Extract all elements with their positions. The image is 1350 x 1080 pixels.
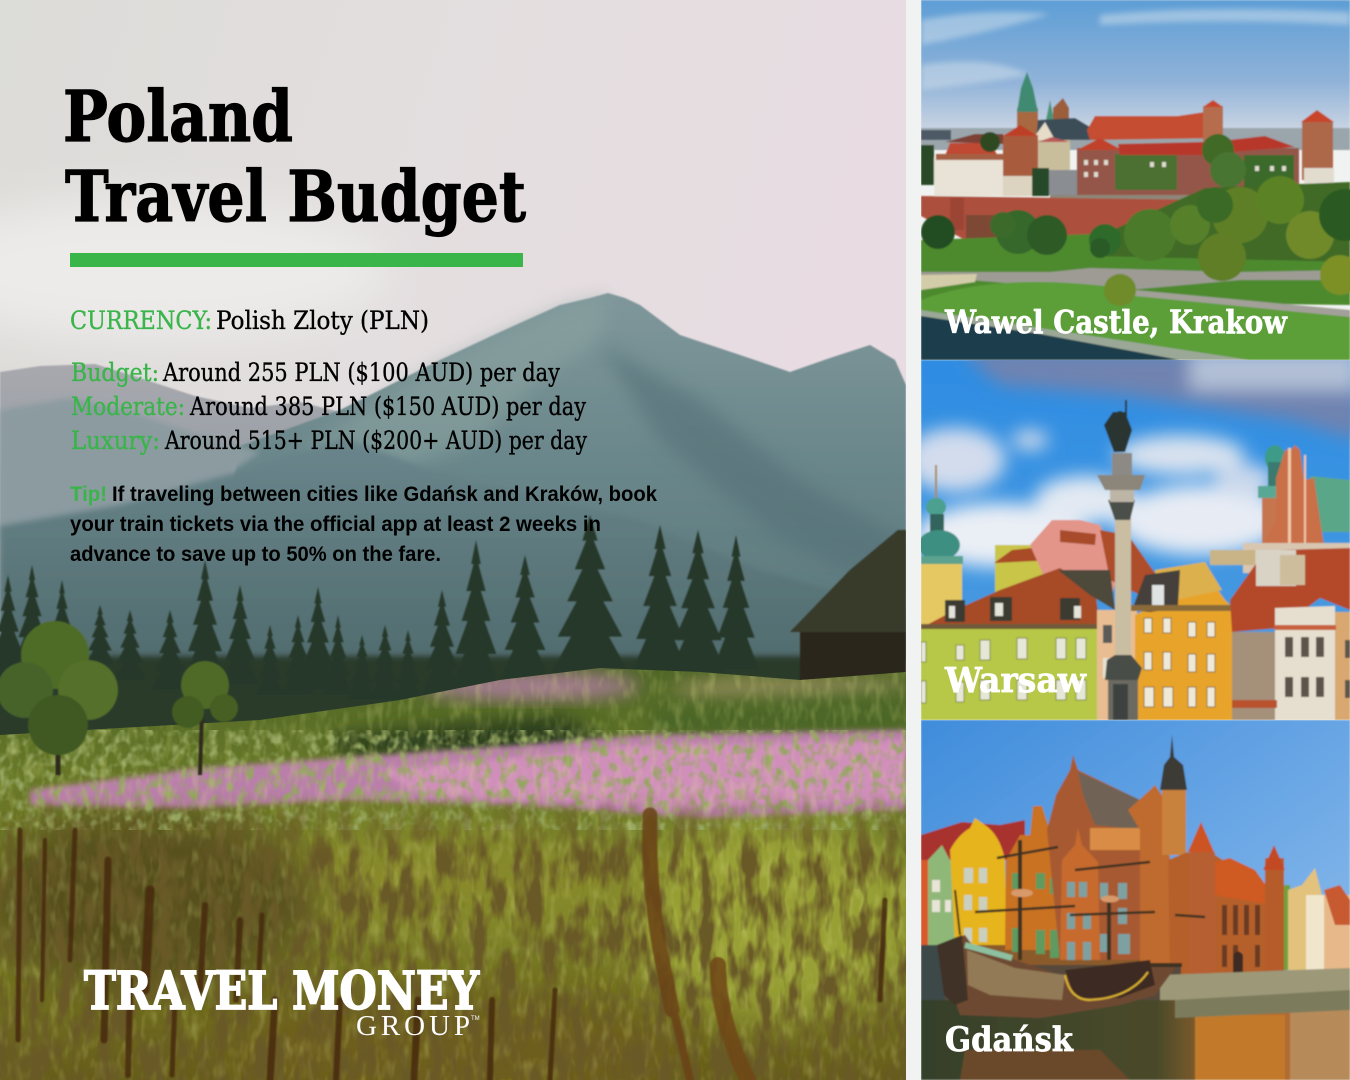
lawns: [921, 225, 1350, 305]
small gabled front: [1060, 828, 1100, 960]
long palace building: [1077, 148, 1299, 196]
green building roof: [928, 568, 1099, 626]
deciduous trees: [0, 621, 238, 775]
water: [921, 1000, 1350, 1080]
photo caption: Wawel Castle: Wawel Castle, Krakow: [944, 303, 1288, 341]
meadow: [0, 660, 920, 1080]
budget levels: Around 385 PLN ($150 AUD) per day: [189, 392, 587, 421]
fortress wall: [921, 194, 1180, 240]
sky: [921, 0, 1350, 135]
budget levels: Budget:: [71, 358, 159, 387]
title: Travel Budget: [65, 155, 526, 238]
brick tower: [1002, 134, 1039, 177]
ornate gable and tower: [1128, 785, 1170, 970]
photo caption: Gdansk: Gdańsk: [945, 1020, 1074, 1060]
brick merchant house: [1047, 755, 1147, 960]
peach building: [1097, 610, 1137, 720]
distant mountains: [0, 293, 906, 680]
orange gabled house: [1005, 806, 1065, 950]
budget levels: Moderate:: [71, 392, 185, 421]
sky: [921, 720, 1350, 971]
yellow-green house: [995, 545, 1050, 595]
tip text: If traveling between cities like Gdańsk and Kraków, book: [112, 483, 657, 506]
left turret: [921, 560, 962, 625]
title underline bar: [70, 253, 523, 267]
sky and clouds: [921, 360, 1350, 660]
budget levels: Around 515+ PLN ($200+ AUD) per day: [164, 426, 588, 455]
tip text: [70, 483, 657, 566]
budget levels: Luxury:: [71, 426, 160, 455]
right red roofs: [1230, 548, 1350, 632]
icon: wooden hut: [790, 530, 906, 682]
currency line: [70, 306, 429, 335]
left houses: [921, 860, 928, 950]
tan and white buildings: [1232, 632, 1277, 720]
treeline: [0, 515, 801, 735]
lime green building: [921, 628, 1097, 720]
orange-yellow buildings: [1134, 590, 1235, 720]
river: [921, 314, 1180, 360]
right colored houses: [1284, 885, 1290, 970]
tip text: advance to save up to 50% on the fare.: [70, 543, 441, 566]
roofs behind: [921, 820, 1025, 860]
back red roofs: [1087, 112, 1223, 140]
green spire tower: [1017, 108, 1038, 140]
panel: Gdansk photo: [921, 720, 1350, 1080]
church and green roof: [1310, 476, 1350, 532]
trees: [921, 176, 1350, 306]
logo: Travel Money Group: TRAVEL MONEY: [84, 961, 480, 1022]
panel: Wawel Castle photo: [921, 0, 1350, 360]
panel: mountain meadow photo: [0, 0, 920, 1080]
tip text: your train tickets via the official app at least 2 weeks in: [70, 513, 601, 536]
title: Poland: [63, 75, 293, 158]
budget levels: [71, 358, 588, 455]
sky: [0, 0, 906, 529]
flower stalks: [18, 815, 885, 1080]
white wall and red roof: [934, 158, 1004, 196]
galleon hull: [937, 935, 1175, 1018]
ship masts and rigging: [955, 840, 1205, 960]
logo: Travel Money Group: GROUP: [356, 1010, 470, 1042]
granary: [1168, 852, 1285, 975]
yellow house: [950, 818, 1007, 945]
tip text: Tip!: [70, 483, 107, 506]
tree beside palace: [1202, 134, 1234, 166]
title: [63, 75, 526, 238]
budget levels: Around 255 PLN ($100 AUD) per day: [162, 358, 561, 387]
currency line: Polish Zloty (PLN): [216, 306, 429, 335]
photo caption: Warsaw: Warsaw: [944, 660, 1087, 701]
pink house: [1030, 519, 1116, 592]
logo: Travel Money Group: TM: [471, 1016, 480, 1022]
quay wall: [921, 965, 1181, 1005]
panel: Warsaw photo: [905, 350, 1350, 720]
right tower: [1302, 122, 1333, 180]
horizon city: [921, 128, 1350, 150]
Sigismund column: [1115, 515, 1131, 655]
currency line: CURRENCY:: [70, 306, 212, 335]
logo: Travel Money Group: [84, 961, 480, 1042]
